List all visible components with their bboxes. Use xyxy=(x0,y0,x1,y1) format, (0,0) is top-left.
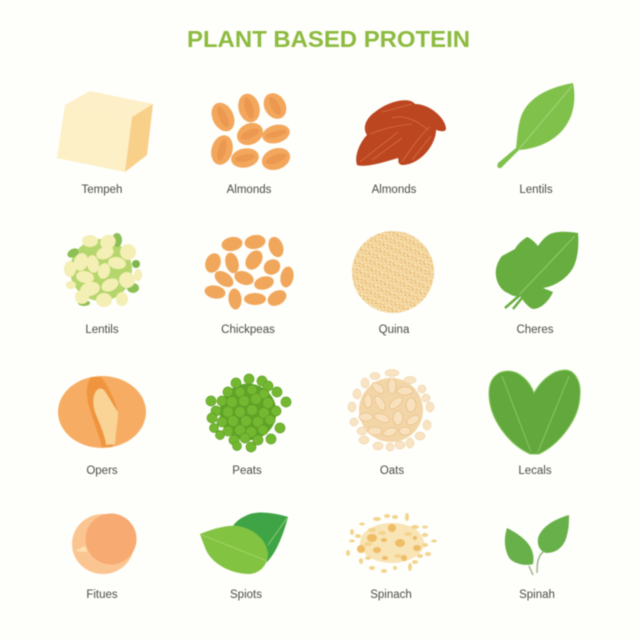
icon: paired leaves xyxy=(489,370,580,454)
label: Cheres xyxy=(516,324,554,336)
label: Oats xyxy=(380,465,404,477)
label: Spinah xyxy=(519,589,555,601)
label: Almonds xyxy=(372,184,417,196)
item: cheres leaf xyxy=(496,232,578,336)
icon: orange disc xyxy=(72,514,136,574)
label: Lentils xyxy=(519,184,553,196)
item: peas xyxy=(206,374,291,477)
icon: grain scatter xyxy=(346,513,437,573)
icon: lobed leaf xyxy=(496,232,578,309)
title: PLANT BASED PROTEIN xyxy=(187,26,470,52)
item: spinah sprout xyxy=(505,515,569,601)
item: tempeh xyxy=(57,91,153,196)
label: Almonds xyxy=(227,184,272,196)
icon: orange legume xyxy=(58,376,146,448)
item: oats xyxy=(348,370,434,477)
icon: green leaf xyxy=(497,83,574,168)
item: spiots leaves xyxy=(200,513,288,601)
label: Lecals xyxy=(518,465,552,477)
label: Fitues xyxy=(86,589,118,601)
item: chickpeas xyxy=(203,233,295,336)
item: fitues xyxy=(72,514,136,601)
label: Tempeh xyxy=(82,184,122,196)
label: Peats xyxy=(232,465,262,477)
icon: green peas xyxy=(206,374,291,452)
item: almonds orange xyxy=(207,89,293,196)
label: Spinach xyxy=(370,589,412,601)
item: spinach grains xyxy=(346,513,437,601)
icon: quinoa pile xyxy=(352,231,434,313)
icon: oat flakes xyxy=(348,370,434,451)
icon: chickpeas scatter xyxy=(203,233,295,310)
label: Lentils xyxy=(85,324,119,336)
icon: two leaves xyxy=(200,513,288,574)
icon: red almonds xyxy=(356,100,446,166)
item: lentils cluster xyxy=(64,232,142,336)
label: Chickpeas xyxy=(221,324,275,336)
item: almonds red xyxy=(356,100,446,196)
item: leaf lentils xyxy=(497,83,574,196)
icon: tempeh block xyxy=(57,91,153,172)
icon: orange almonds xyxy=(207,89,293,174)
item: opers xyxy=(58,376,146,477)
label: Opers xyxy=(86,465,118,477)
label: Spiots xyxy=(230,589,262,601)
label: Quina xyxy=(379,324,410,336)
item: lecals leaves xyxy=(489,370,580,477)
icon: lentil pile xyxy=(64,232,142,307)
item: quinoa xyxy=(352,231,434,336)
icon: sprout leaves xyxy=(505,515,569,575)
